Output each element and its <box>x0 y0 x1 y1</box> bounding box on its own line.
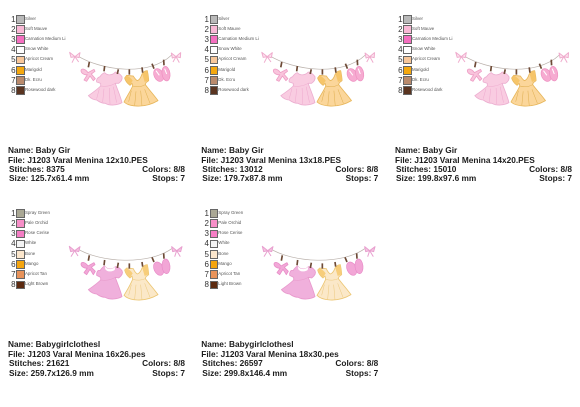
colour legend: Silver <box>25 16 36 21</box>
colour legend: Snow White <box>412 46 435 51</box>
design details: File: J1203 Varal Menina 12x10.PES <box>8 155 148 165</box>
colour legend: 3 <box>11 229 16 238</box>
colour legend: Snow White <box>25 46 48 51</box>
colour legend: 8 <box>398 86 403 95</box>
panel: Baby Gir 14x20 <box>395 15 572 183</box>
colour legend: Rose Cerise <box>218 230 242 235</box>
colour legend: Dk. Ecru <box>218 77 235 82</box>
colour legend: 4 <box>11 239 16 248</box>
design details: Stops: 7 <box>152 368 185 378</box>
colour legend: Bone <box>25 251 35 256</box>
colour legend: Dk. Ecru <box>25 77 42 82</box>
design details: Stops: 7 <box>539 173 572 183</box>
colour legend: Snow White <box>218 46 242 51</box>
colour legend: Silver <box>412 16 423 21</box>
colour legend: 1 <box>11 15 16 24</box>
colour legend: 8 <box>204 86 209 95</box>
colour legend: Apricot Cream <box>25 56 53 61</box>
design details: Colors: 8/8 <box>142 164 185 174</box>
colour legend: 6 <box>11 66 16 75</box>
design details: File: J1203 Varal Menina 16x26.pes <box>8 349 145 359</box>
design details: Stitches: 26597 <box>202 358 263 368</box>
colour legend: Soft Mauve <box>218 26 241 31</box>
illustration: baby clothes on a clothesline <box>69 52 182 106</box>
colour legend: Rosewood dark <box>25 87 56 92</box>
colour legend: 1 <box>398 15 403 24</box>
design details: Stitches: 15010 <box>396 164 456 174</box>
colour legend: 3 <box>398 35 403 44</box>
colour legend: 2 <box>11 25 16 34</box>
colour legend: Bone <box>218 251 229 256</box>
colour legend: 2 <box>204 219 209 228</box>
colour legend: 3 <box>204 35 209 44</box>
colour legend: 8 <box>204 280 209 289</box>
design details: Stitches: 21621 <box>9 358 69 368</box>
design details <box>201 145 378 183</box>
colour legend: 5 <box>204 55 209 64</box>
colour legend: 6 <box>11 260 16 269</box>
colour legend <box>11 209 50 289</box>
colour legend: Apricot Tan <box>218 271 240 276</box>
illustration: baby clothes on a clothesline <box>262 246 376 300</box>
colour legend: White <box>218 240 230 245</box>
colour legend: Soft Mauve <box>25 26 47 31</box>
design details: File: J1203 Varal Menina 13x18.PES <box>201 155 341 165</box>
colour legend: Marigold <box>25 67 42 72</box>
colour legend <box>204 15 259 95</box>
design details: Stops: 7 <box>346 173 378 183</box>
design details: Colors: 8/8 <box>335 164 378 174</box>
colour legend: Rosewood dark <box>218 87 249 92</box>
illustration: baby clothes on a clothesline <box>68 246 182 300</box>
colour legend: Mango <box>218 261 232 266</box>
colour legend: 7 <box>398 76 403 85</box>
colour legend: 7 <box>204 270 209 279</box>
colour legend: 5 <box>204 250 209 259</box>
design details <box>8 145 185 183</box>
colour legend: Mango <box>25 261 38 266</box>
colour legend: 1 <box>11 209 16 218</box>
colour legend: White <box>25 240 36 245</box>
colour legend: 4 <box>204 239 209 248</box>
colour legend: 2 <box>398 25 403 34</box>
colour legend <box>204 209 243 289</box>
panel: Baby Gir 13x18 <box>201 15 378 183</box>
colour legend <box>398 15 453 95</box>
colour legend: 3 <box>11 35 16 44</box>
colour legend: Soft Mauve <box>412 26 434 31</box>
colour legend: 3 <box>204 229 209 238</box>
colour legend: Pale Orchid <box>25 220 48 225</box>
colour legend: 1 <box>204 209 209 218</box>
design details: Stitches: 8375 <box>9 164 65 174</box>
colour legend: 4 <box>398 45 403 54</box>
colour legend: 1 <box>204 15 209 24</box>
colour legend: Pale Orchid <box>218 220 241 225</box>
illustration: baby clothes on a clothesline <box>455 52 569 106</box>
design details: Name: Baby Gir <box>8 145 70 155</box>
design details: Stops: 7 <box>346 368 378 378</box>
colour legend: 5 <box>11 250 16 259</box>
colour legend: Spray Green <box>25 210 50 215</box>
colour legend: Apricot Cream <box>412 56 440 61</box>
colour legend: 8 <box>11 86 16 95</box>
colour legend: Carnation Medium Li <box>412 36 453 41</box>
design details <box>395 145 572 183</box>
colour legend: Rose Cerise <box>25 230 49 235</box>
colour legend: 7 <box>11 76 16 85</box>
colour legend: 6 <box>204 66 209 75</box>
colour legend: Rosewood dark <box>412 87 443 92</box>
design details: Stops: 7 <box>152 173 185 183</box>
panel: Babygirlclothesl 16x26 <box>8 209 185 378</box>
design details: Size: 299.8x146.4 mm <box>202 368 287 378</box>
colour legend: 2 <box>204 25 209 34</box>
design details: File: J1203 Varal Menina 14x20.PES <box>395 155 535 165</box>
colour legend: Spray Green <box>218 210 243 215</box>
colour legend: Dk. Ecru <box>412 77 429 82</box>
design details: Name: Babygirlclothesl <box>8 339 100 349</box>
colour legend: 5 <box>398 55 403 64</box>
colour legend: 6 <box>398 66 403 75</box>
colour legend: Carnation Medium Li <box>218 36 259 41</box>
illustration: baby clothes on a clothesline <box>261 52 375 106</box>
design details: Colors: 8/8 <box>335 358 378 368</box>
design details: Name: Baby Gir <box>201 145 264 155</box>
colour legend: Light Brown <box>218 281 241 286</box>
design details: Colors: 8/8 <box>529 164 572 174</box>
colour legend: 4 <box>204 45 209 54</box>
colour legend: 7 <box>204 76 209 85</box>
colour legend: Marigold <box>412 67 429 72</box>
design details <box>8 339 185 378</box>
design details: Size: 259.7x126.9 mm <box>9 368 94 378</box>
design details: Name: Babygirlclothesl <box>201 339 294 349</box>
design details: Size: 125.7x61.4 mm <box>9 173 89 183</box>
design details: Name: Baby Gir <box>395 145 457 155</box>
design details: Stitches: 13012 <box>202 164 263 174</box>
colour legend: 5 <box>11 55 16 64</box>
colour legend: 4 <box>11 45 16 54</box>
colour legend: Silver <box>218 16 229 21</box>
design details: File: J1203 Varal Menina 18x30.pes <box>201 349 339 359</box>
panel: Babygirlclothesl 18x30 <box>201 209 378 378</box>
design details <box>201 339 378 378</box>
colour legend: 8 <box>11 280 16 289</box>
panel: Baby Gir 12x10 <box>8 15 185 183</box>
colour legend: Marigold <box>218 67 235 72</box>
design details: Size: 179.7x87.8 mm <box>202 173 283 183</box>
colour legend <box>11 15 66 95</box>
colour legend: Carnation Medium Li <box>25 36 66 41</box>
colour legend: Light Brown <box>25 281 48 286</box>
design details: Colors: 8/8 <box>142 358 185 368</box>
colour legend: Apricot Cream <box>218 56 246 61</box>
colour legend: 2 <box>11 219 16 228</box>
colour legend: Apricot Tan <box>25 271 47 276</box>
colour legend: 6 <box>204 260 209 269</box>
colour legend: 7 <box>11 270 16 279</box>
design details: Size: 199.8x97.6 mm <box>396 173 476 183</box>
